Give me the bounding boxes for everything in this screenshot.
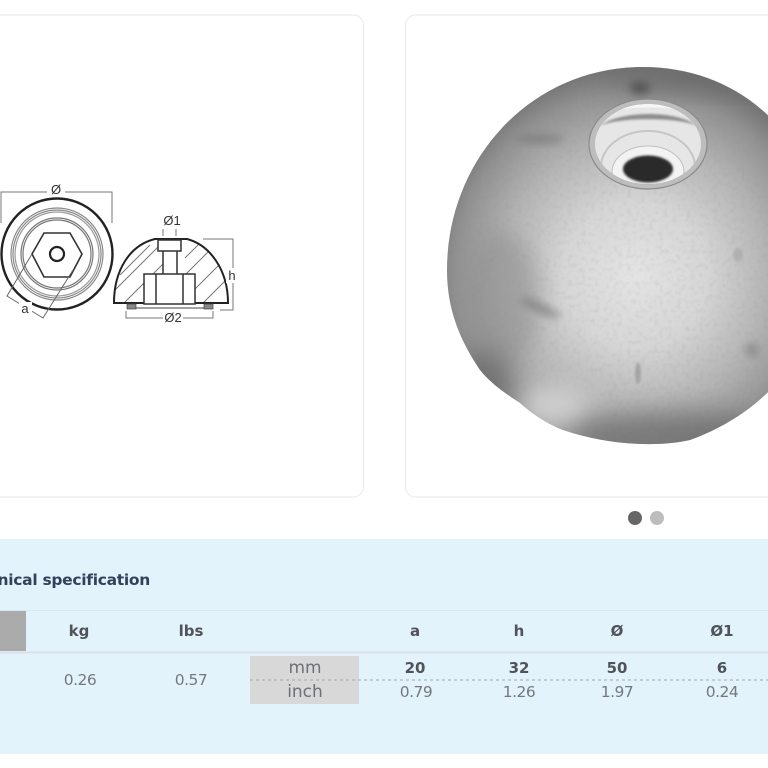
dimension: h: h: [228, 268, 236, 283]
drawing: side section view: [113, 238, 229, 310]
dimension: h: [203, 239, 240, 310]
unit labels: mm: [288, 658, 322, 678]
table header: Ø1: [710, 622, 734, 640]
inch values: [400, 683, 738, 701]
dimension: outer diameter front view: Ø: [51, 182, 61, 197]
photo: spherical anode: [440, 60, 768, 460]
table header: lbs: [179, 622, 203, 640]
inch values: 1.26: [503, 683, 535, 701]
dimension: O2: [126, 310, 213, 325]
weight values: [64, 671, 207, 689]
dimension: O1: Ø1: [163, 213, 181, 228]
icon: countersunk bore: [588, 100, 708, 190]
panel: technical specification: [0, 539, 768, 754]
millimetre values: 50: [607, 659, 627, 677]
table header: a: [410, 622, 420, 640]
inch values: 0.24: [706, 683, 738, 701]
weight values: 0.26: [64, 671, 96, 689]
dimension: hexagon a: [7, 254, 73, 318]
millimetre values: 20: [405, 659, 425, 677]
millimetre values: [405, 659, 727, 677]
inch values: 1.97: [601, 683, 633, 701]
drawing: front view: [2, 198, 112, 310]
dimension: O1: [163, 213, 181, 236]
table header: Ø: [611, 622, 624, 640]
table header: h: [514, 622, 524, 640]
dimension: hexagon a: a: [21, 301, 29, 316]
dimension: O2: Ø2: [164, 310, 182, 325]
spec table: [0, 610, 768, 704]
millimetre values: 6: [717, 659, 727, 677]
millimetre values: 32: [509, 659, 529, 677]
unit labels: [250, 656, 359, 704]
inch values: 0.79: [400, 683, 432, 701]
table header: kg: [69, 622, 89, 640]
table header: [69, 622, 734, 640]
panel: technical drawing card: [0, 15, 364, 497]
panel: product photo card: [406, 15, 768, 497]
unit labels: inch: [287, 682, 323, 702]
weight values: 0.57: [175, 671, 207, 689]
carousel dots: [628, 511, 664, 525]
dimension: outer diameter front view: [1, 182, 112, 223]
